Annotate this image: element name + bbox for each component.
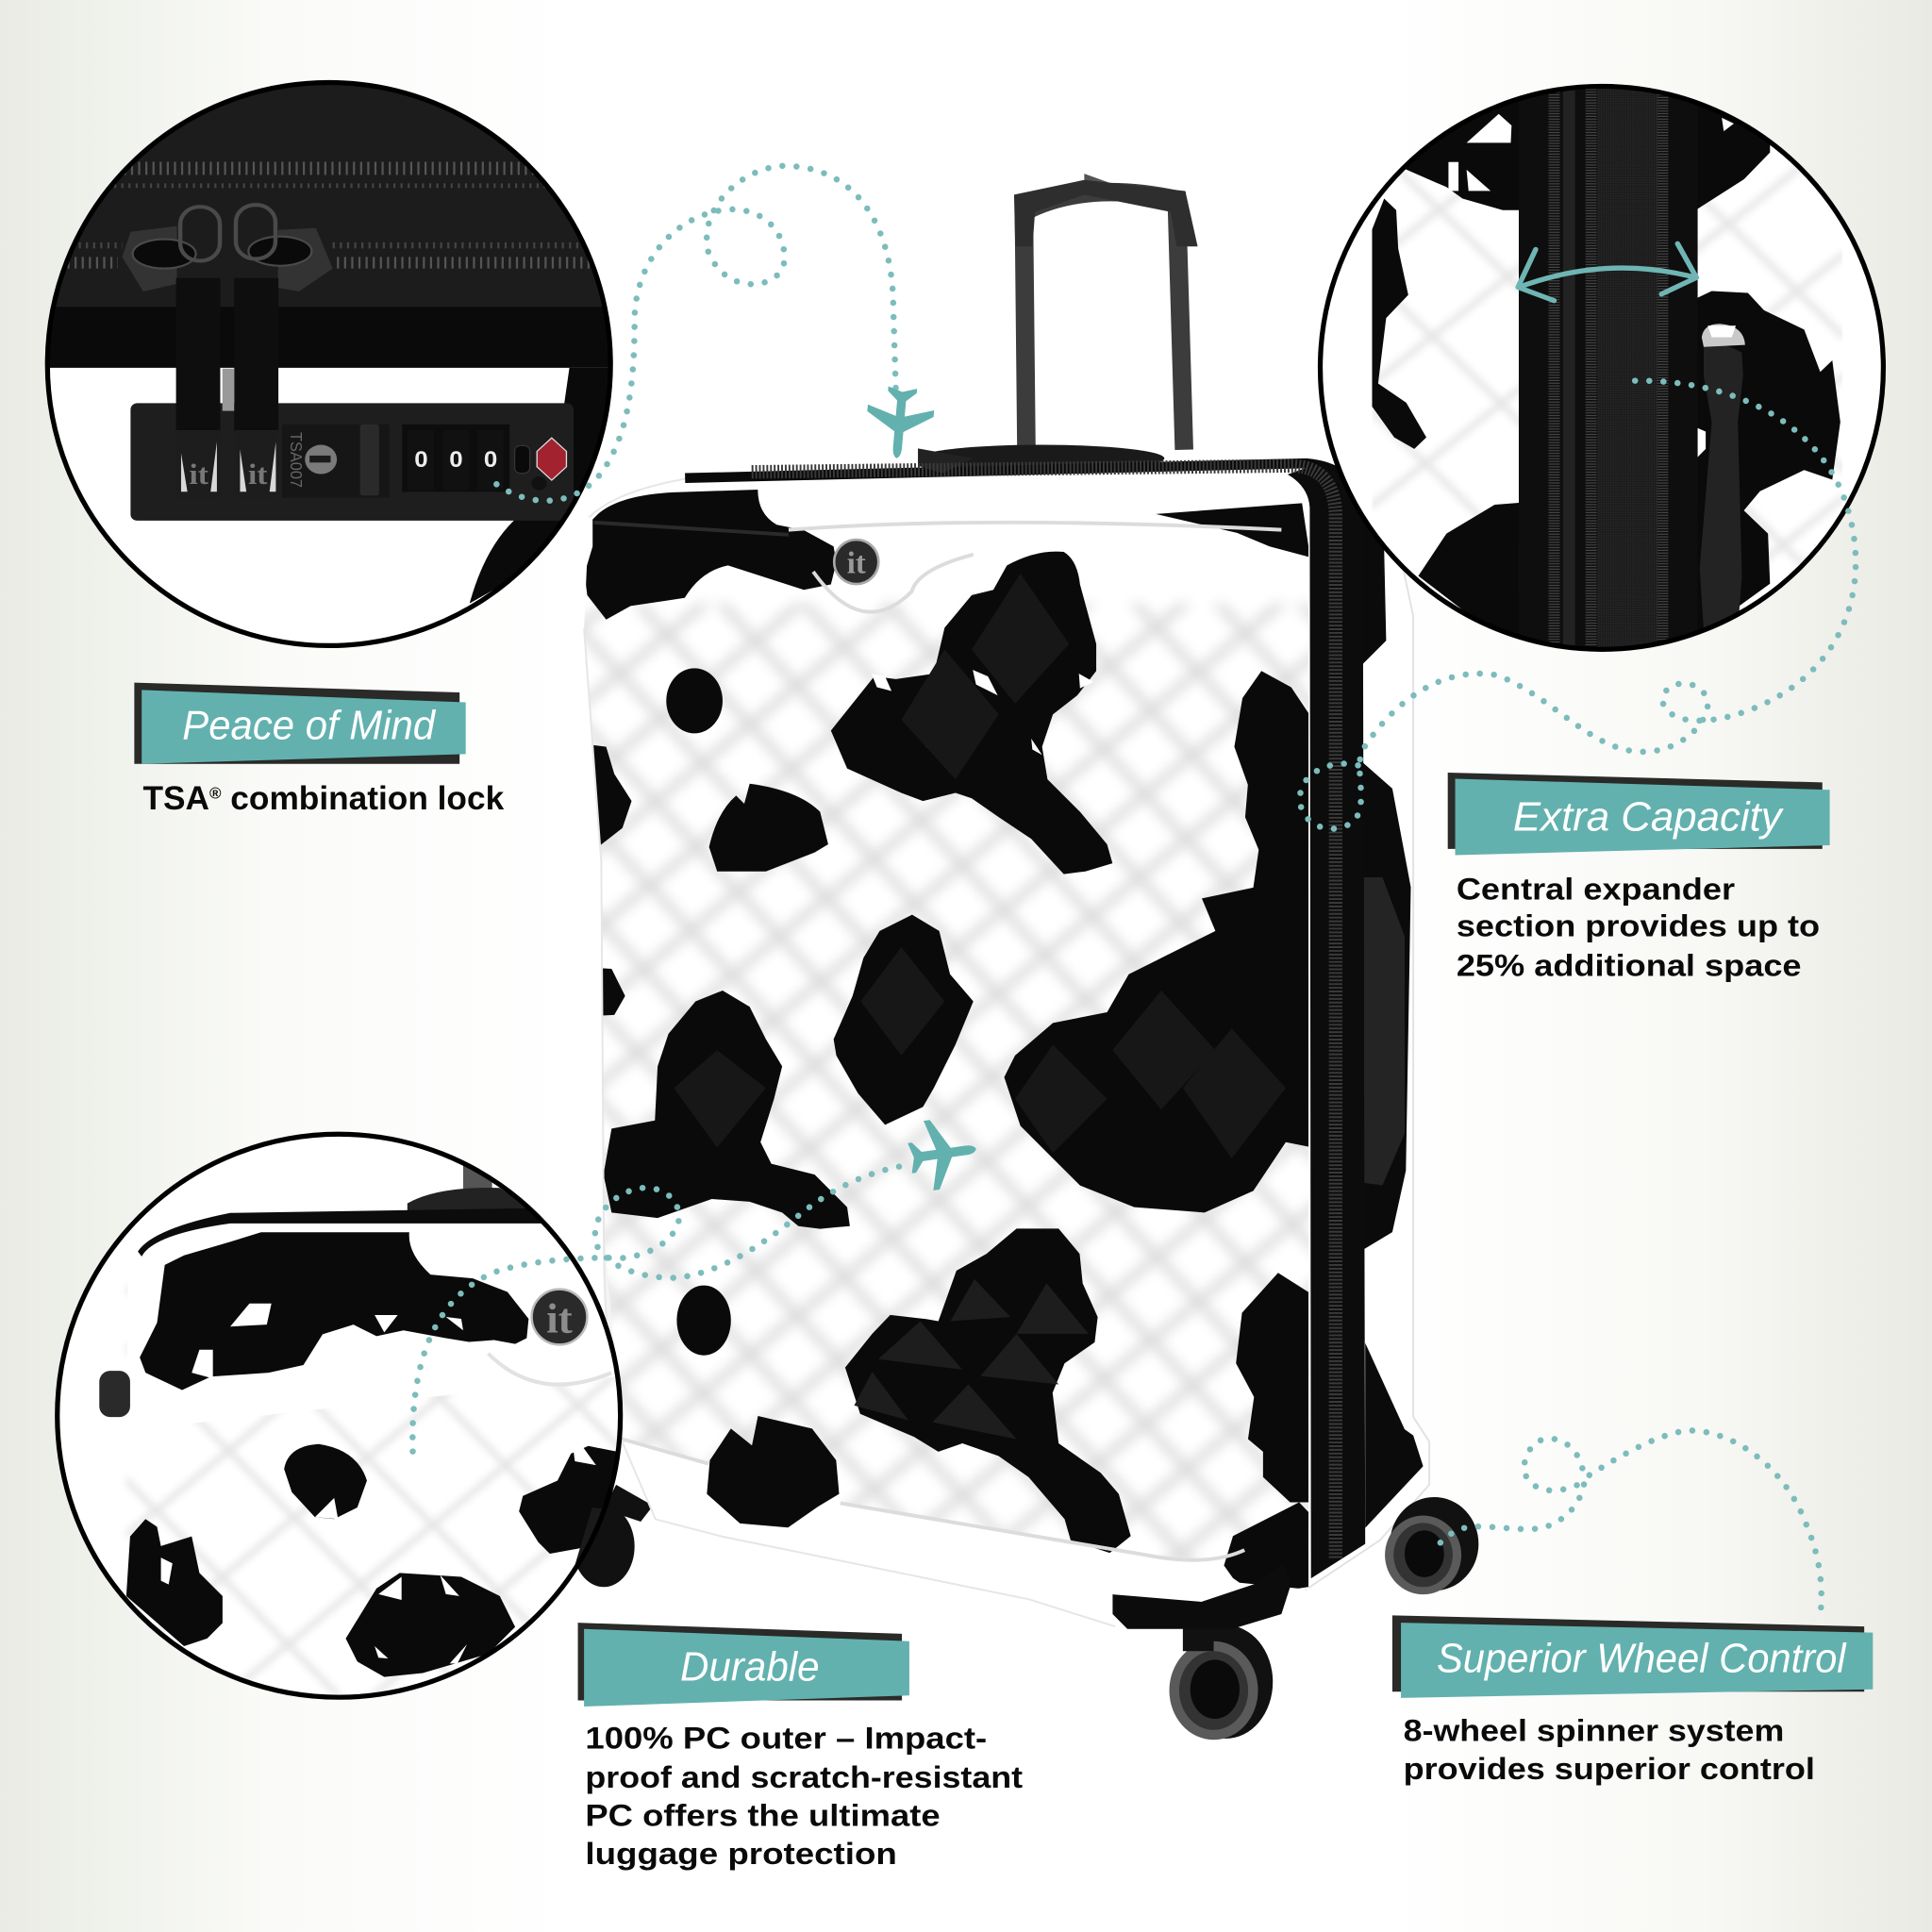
text: capacity description: Central expander xyxy=(1457,871,1735,906)
icon: expansion arrow xyxy=(1518,243,1696,301)
dotted route: wheel to banner xyxy=(1441,1430,1822,1619)
text: lock description: combination lock xyxy=(222,780,505,817)
brand badge xyxy=(532,1290,587,1344)
detail circle: durable shell xyxy=(49,1127,641,1719)
text: durable description: 100% PC outer – Impact- xyxy=(585,1720,987,1755)
zip pulls xyxy=(122,205,333,499)
text: wheel description xyxy=(1404,1713,1815,1786)
dotted route: lock to plane xyxy=(496,166,896,501)
text: capacity description xyxy=(1457,871,1820,982)
lock plate xyxy=(130,403,574,521)
lock plate: 0 xyxy=(414,448,428,473)
lock plate: TSA007 xyxy=(287,432,306,488)
text: durable description: PC offers the ultimate xyxy=(585,1798,941,1833)
telescoping trolley handle xyxy=(1014,174,1198,450)
suitcase xyxy=(566,445,1478,1740)
front shell xyxy=(584,490,1309,1590)
suitcase base corner xyxy=(1112,1562,1291,1629)
expander fabric and zippers xyxy=(1519,75,1698,679)
brand badge xyxy=(834,540,878,584)
text: capacity description: 25% additional space xyxy=(1457,947,1802,982)
top zip and handle housing xyxy=(685,445,1349,483)
icon: plane top xyxy=(863,385,936,461)
zip pulls: it xyxy=(189,458,208,491)
brand badge: it xyxy=(847,546,866,580)
text: lock description: TSA xyxy=(143,780,209,817)
cow spots upper xyxy=(566,490,1313,1229)
shell rim lines xyxy=(623,523,1281,1560)
text: durable description xyxy=(585,1720,1023,1871)
text: wheel description: 8-wheel spinner system xyxy=(1404,1713,1784,1748)
banner: Superior Wheel Control: Superior Wheel Control xyxy=(1437,1636,1847,1681)
icon: plane lower xyxy=(905,1114,981,1193)
text: durable description: proof and scratch-resistant xyxy=(585,1759,1023,1794)
brand badge: it xyxy=(546,1294,573,1341)
dotted route: handle to expander xyxy=(1300,381,1856,828)
suitcase wheels xyxy=(573,1485,1478,1740)
dotted route: shell to plane xyxy=(412,1164,912,1452)
banner: Superior Wheel Control xyxy=(1392,1615,1873,1698)
lock plate: 0 xyxy=(449,448,463,473)
banner: Extra Capacity xyxy=(1448,773,1830,855)
zip pulls: it xyxy=(248,458,268,491)
text: capacity description: section provides up to xyxy=(1457,908,1820,943)
lock plate: 0 xyxy=(484,448,497,473)
banner: Extra Capacity: Extra Capacity xyxy=(1513,794,1784,840)
banner: Durable xyxy=(578,1623,909,1707)
text: durable description: luggage protection xyxy=(585,1836,897,1871)
banner: Durable: Durable xyxy=(680,1645,820,1690)
side carry handle xyxy=(1700,324,1745,630)
text: lock description: ® xyxy=(209,784,222,802)
text: wheel description: provides superior control xyxy=(1404,1751,1815,1786)
suitcase side panel xyxy=(1306,468,1429,1590)
shell outline xyxy=(584,478,1115,1626)
detail circle: TSA lock xyxy=(37,74,628,665)
central expander zip strip xyxy=(752,466,1365,1578)
banner: Peace of Mind xyxy=(134,683,466,764)
banner: Peace of Mind: Peace of Mind xyxy=(182,704,437,749)
detail circle: expander xyxy=(1317,83,1886,652)
cow spots lower xyxy=(676,1228,1311,1595)
